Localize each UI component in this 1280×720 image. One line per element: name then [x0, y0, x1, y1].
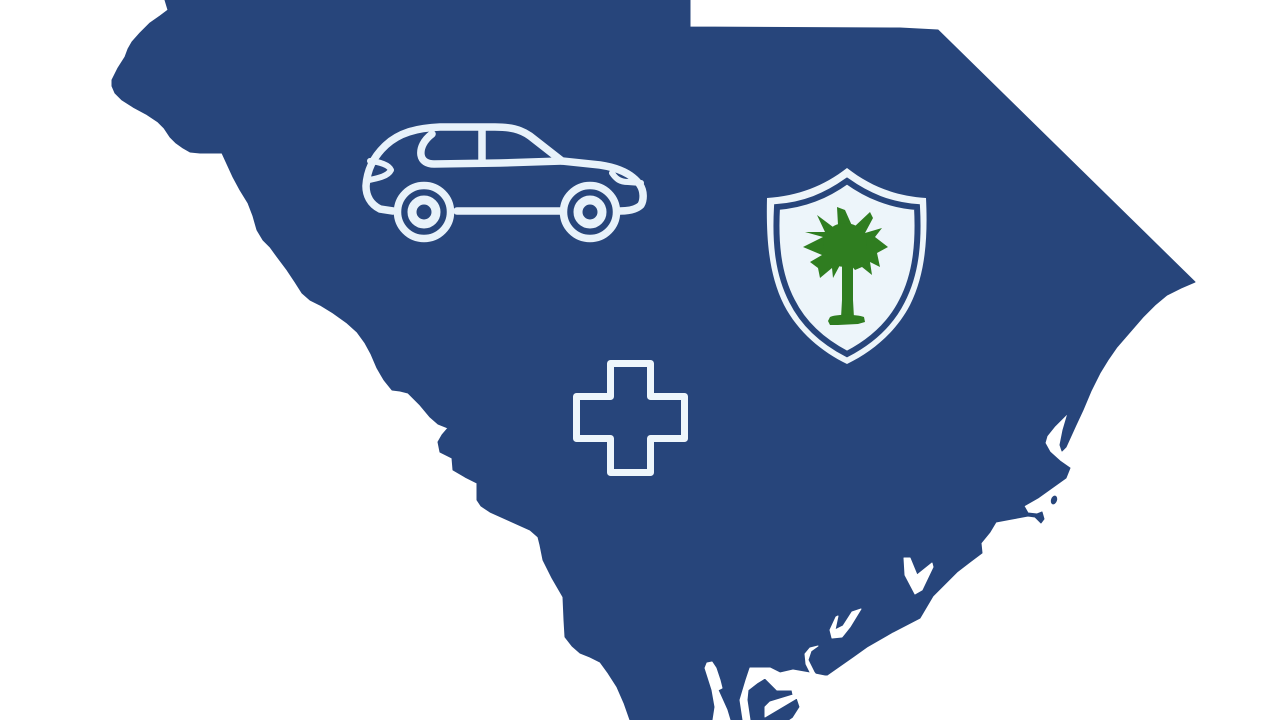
- palm crown centre: [823, 223, 867, 267]
- icon: car: [366, 127, 643, 238]
- hood detail: [612, 173, 641, 183]
- inlet: left curl: [805, 646, 826, 690]
- car windows: [421, 130, 562, 164]
- shield outer: [767, 168, 927, 364]
- palm base: [828, 315, 865, 325]
- tail light: [369, 161, 391, 180]
- front wheel: [564, 186, 616, 238]
- icon: medical cross: [576, 364, 684, 472]
- icon: palmetto shield: [767, 168, 927, 364]
- inlet: middle hook: [830, 609, 861, 638]
- island dot: offshore: [1050, 495, 1058, 505]
- rear wheel: [398, 186, 450, 238]
- shield navy band: [776, 181, 918, 354]
- palmetto tree: [803, 207, 888, 325]
- coastal inlets and channels: [705, 558, 933, 720]
- channel: lower coast: [705, 662, 830, 720]
- palm crown: [803, 207, 888, 278]
- palm trunk: [841, 260, 854, 318]
- inlet: right V: [904, 558, 933, 594]
- car body: [366, 127, 643, 211]
